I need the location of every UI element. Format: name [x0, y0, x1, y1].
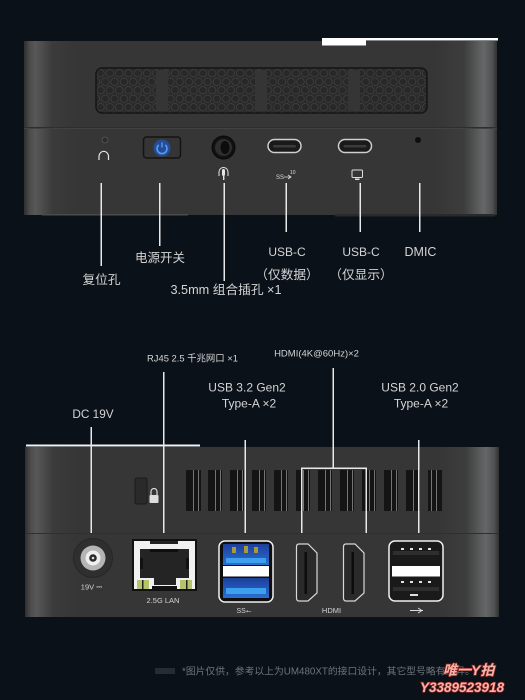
label: USB-C display	[329, 245, 393, 282]
footnote: *图片仅供，参考以上为UM480XT的接口设计，其它型号略有差异。	[182, 664, 475, 678]
panel: front device	[24, 38, 498, 216]
label: USB 2.0	[381, 380, 459, 410]
label: reset hole: 复位孔	[82, 273, 121, 287]
label: DC 19V: DC 19V	[72, 407, 114, 421]
kensington slot	[135, 478, 147, 504]
grill vent	[96, 68, 427, 113]
vents	[186, 470, 442, 511]
leader lines: front	[100, 183, 420, 281]
label: HDMI spec: HDMI(4K@60Hz)×2	[274, 348, 359, 360]
LAN port	[132, 539, 197, 591]
power button	[144, 137, 180, 158]
panel: rear device	[25, 444, 499, 617]
USB-C port data	[268, 140, 301, 152]
USB-C port display	[338, 140, 372, 152]
DMIC hole	[415, 137, 421, 143]
HDMI tongue 1	[304, 552, 307, 594]
icon: superspeed 10	[276, 170, 296, 181]
label: audio jack: 3.5mm 组合插孔 ×1	[170, 283, 282, 297]
reset hole	[99, 137, 108, 160]
watermark: 唯一Y拍	[443, 662, 496, 678]
label: USB 2.0: USB 2.0 Gen2	[381, 380, 459, 394]
label: power switch: 电源开关	[135, 251, 185, 265]
icon: headset mic	[219, 168, 228, 180]
USB 3.2 port	[219, 541, 273, 602]
label: USB-C data: USB-C	[268, 245, 306, 259]
HDMI port 2	[344, 544, 364, 601]
label: USB-C display: USB-C	[342, 245, 380, 259]
label: 19V: 19V ⎓	[81, 582, 103, 592]
highlight: rear top edge	[26, 444, 200, 446]
USB 2.0 port	[389, 541, 443, 601]
label: superspeed: SS⭠	[237, 608, 252, 615]
icon: superspeed 10: SS	[276, 175, 284, 181]
label: USB-C data: （仅数据）	[255, 268, 319, 282]
label: DMIC: DMIC	[405, 245, 436, 259]
icon: superspeed 10: 10	[290, 170, 296, 176]
label: USB-C data	[255, 245, 319, 282]
audio jack	[212, 136, 235, 159]
HDMI port 1	[296, 544, 317, 601]
label: RJ45: RJ45 2.5 千兆网口 ×1	[147, 352, 238, 364]
DC power jack	[74, 538, 112, 578]
icon: monitor	[352, 170, 362, 180]
label: 2.5G LAN: 2.5G LAN	[147, 596, 179, 605]
watermark: Y3389523918	[420, 680, 505, 695]
label: USB-C display: （仅显示）	[329, 268, 393, 282]
label: USB 3.2	[208, 380, 286, 410]
HDMI tongue 2	[352, 552, 354, 594]
highlight: top edge	[322, 38, 498, 46]
icon: usb trident	[410, 608, 423, 613]
icon: lock	[150, 489, 158, 503]
label: USB 3.2: Type-A ×2	[222, 396, 277, 410]
label: USB 3.2: USB 3.2 Gen2	[208, 380, 286, 394]
label: USB 2.0: Type-A ×2	[394, 396, 449, 410]
leader lines: rear	[90, 368, 420, 533]
vent highlights	[193, 470, 437, 511]
watermark	[420, 662, 505, 695]
label: HDMI: HDMI	[322, 606, 341, 615]
